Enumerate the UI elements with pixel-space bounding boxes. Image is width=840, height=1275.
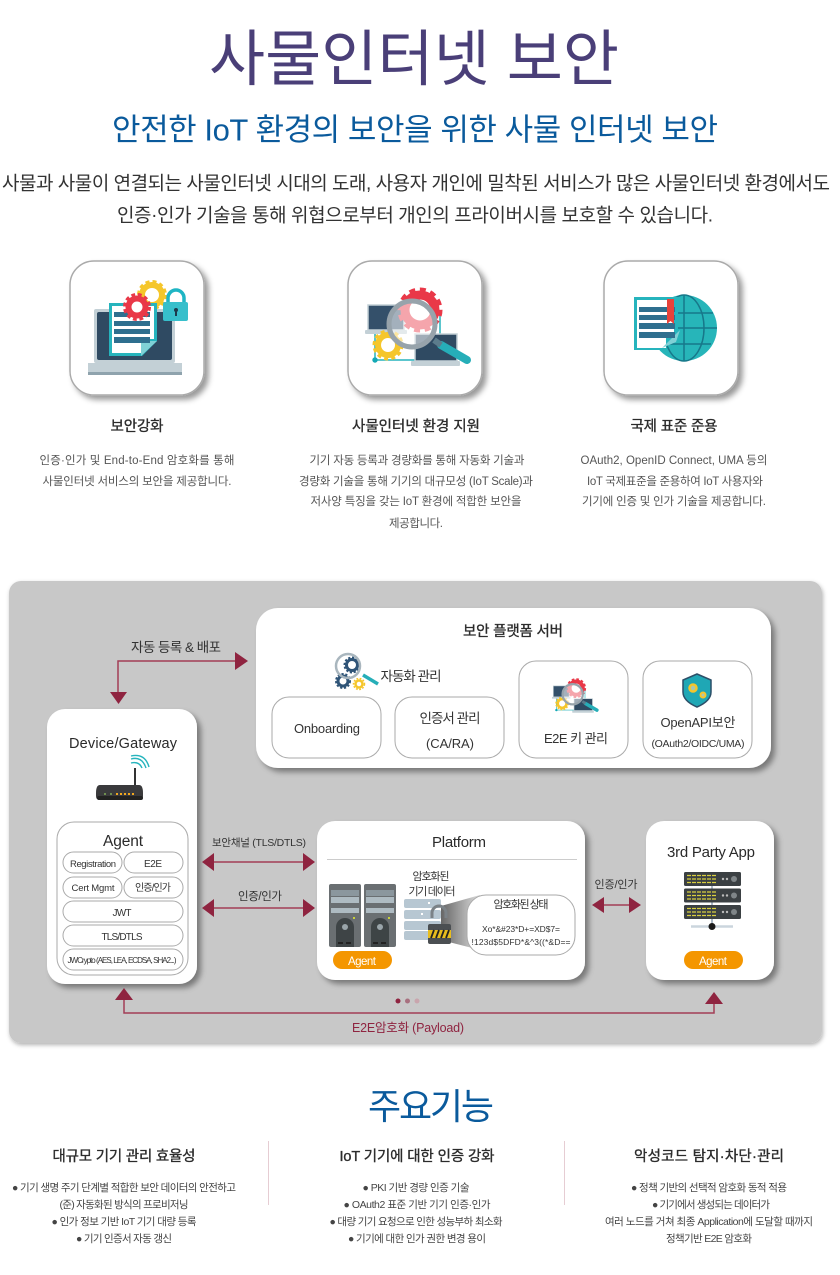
box: Onboarding: Onboarding [294,721,360,736]
list: ● 정책 기반의 선택적 암호화 동적 적용 [631,1182,787,1194]
description: 사물인터넷 서비스의 보안을 제공합니다. [42,475,232,488]
description: 제공합니다. [389,517,443,530]
icon: card with magnifier [348,261,482,395]
list: ● 인가 정보 기반 IoT 기기 대량 등록 [52,1216,197,1228]
badge: Agent [684,951,743,969]
list [605,1182,813,1245]
callout: encrypted state: 암호화된 상태 [494,898,548,911]
label: 자동화 관리 [380,669,442,684]
box: Agent: Agent [103,833,144,850]
icon: router [96,755,149,800]
description: 기기 자동 등록과 경량화를 통해 자동화 기술과 [310,453,525,467]
pill: JWCrypto [63,949,183,970]
list: (준) 자동화된 방식의 프로비저닝 [60,1199,188,1211]
badge: Agent: Agent [348,956,377,968]
panel: Device/Gateway [47,709,197,984]
list [12,1181,236,1245]
box: Onboarding [272,697,381,758]
arrow: auto registration [110,640,248,704]
callout cone [441,895,480,950]
arrow: E2E payload [115,988,723,1035]
panel: 보안 플랫폼 서버 [256,608,771,768]
box: E2E 키 관리 [519,661,628,758]
label: encrypted device data: 암호화된 [412,870,450,883]
arrow: 인증/인가 right [592,878,641,913]
description: 저사양 특징을 갖는 IoT 환경에 적합한 보안을 [310,494,522,508]
column: 대규모 기기 관리 효율성 [12,1148,236,1245]
panel: 보안강화 [40,261,234,488]
description: OAuth2, OpenID Connect, UMA 등의 [580,454,768,467]
heading: 국제 표준 준용 [630,418,718,435]
label: encrypted device data: 기기 데이터 [408,885,456,898]
list: ● 기기 생명 주기 단계별 적합한 보안 데이터의 안전하고 [12,1181,236,1194]
box: 인증서 관리: (CA/RA) [426,736,474,751]
panel: 사물인터넷 환경 지원 [299,261,533,530]
pill: Registration: Registration [70,859,116,870]
list: ● OAuth2 표준 기반 기기 인증·인가 [344,1199,491,1211]
description: 인증·인가 및 End-to-End 암호화를 통해 [40,454,234,467]
description: 기기에 인증 및 인가 기술을 제공합니다. [582,495,766,508]
list: ● 기기에서 생성되는 데이터가 [652,1199,770,1211]
pill: JWT: JWT [112,908,132,919]
box: Agent [57,822,188,975]
box: 인증서 관리: 인증서 관리 [420,711,480,726]
pill: Registration [63,852,122,873]
heading: 보안 플랫폼 서버 [463,623,563,640]
intro text: 사물과 사물이 연결되는 사물인터넷 시대의 도래, 사용자 개인에 밀착된 서비스가 많은 사물인터넷 환경에서도 [2,172,830,194]
description [40,454,234,488]
panel: 국제 표준 준용 [580,261,768,508]
icon: laptop with document, gears and lock [70,261,204,395]
icon: automation gears [336,654,378,690]
arrow: 인증/인가 right: 인증/인가 [594,878,638,891]
subtitle: 안전한 IoT 환경의 보안을 위한 사물 인터넷 보안 [112,112,718,148]
column: IoT 기기에 대한 인증 강화: IoT 기기에 대한 인증 강화 [340,1148,494,1165]
callout: encrypted state [467,895,575,955]
list: ● PKI 기반 경량 인증 기술 [362,1181,470,1194]
description: IoT 국제표준을 준용하여 IoT 사용자와 [587,474,763,488]
heading: 보안강화 [110,418,164,435]
badge: Agent: Agent [699,956,728,968]
panel: Platform [317,821,585,980]
arrow: 보안채널: 보안채널 (TLS/DTLS) [212,837,306,849]
icon: server rack [684,872,741,930]
column: 악성코드 탐지·차단·관리: 악성코드 탐지·차단·관리 [634,1148,784,1165]
pill: Cert Mgmt [63,877,122,898]
heading: Device/Gateway [69,736,178,752]
box: E2E 키 관리: E2E 키 관리 [544,731,608,746]
list: 정책기반 E2E 암호화 [666,1233,752,1245]
list: ● 기기에 대한 인가 권한 변경 용이 [348,1232,486,1245]
arrow: auto registration: 자동 등록 & 배포 [131,640,221,655]
box: OpenAPI보안: OpenAPI보안 [660,715,736,730]
pill: E2E [124,852,183,873]
description: 경량화 기술을 통해 기기의 대규모성 (IoT Scale)과 [299,474,533,488]
pill: Cert Mgmt: Cert Mgmt [72,883,115,894]
pill: TLS/DTLS [63,925,183,946]
description [299,453,533,530]
intro text: 인증·인가 기술을 통해 위협으로부터 개인의 프라이버시를 보호할 수 있습니다. [117,204,713,226]
column: 대규모 기기 관리 효율성: 대규모 기기 관리 효율성 [52,1148,196,1165]
pill: JWCrypto: JWCrypto (AES, LEA, ECDSA, SHA2...) [68,956,177,965]
heading: 3rd Party App [667,844,755,861]
column: 악성코드 탐지·차단·관리 [605,1148,813,1245]
pill: E2E: E2E [144,859,162,870]
pill: 인증/인가: 인증/인가 [135,882,171,894]
heading: 주요기능: 주요기능 [368,1086,494,1127]
pill: 인증/인가 [124,877,183,898]
column: IoT 기기에 대한 인증 강화 [330,1148,503,1245]
icon: database with lock [404,899,451,944]
arrow: 인증/인가 left: 인증/인가 [238,890,282,903]
intro text [2,172,830,226]
box: OpenAPI보안: (OAuth2/OIDC/UMA) [652,738,744,750]
pill: JWT [63,901,183,922]
callout: encrypted state: !123d$5DFD*&^3((*&D== [472,937,571,947]
list: ● 대량 기기 요청으로 인한 성능부하 최소화 [330,1215,503,1228]
heading: 사물인터넷 환경 지원 [352,418,480,435]
list [330,1181,503,1245]
arrow: 인증/인가 left [202,890,315,917]
panel: architecture diagram [9,581,822,1043]
arrow: E2E payload: E2E암호화 (Payload) [352,1021,464,1035]
icon: servers [329,884,396,947]
description [580,454,768,508]
icon: document and globe [604,261,738,395]
box: 인증서 관리 [395,697,504,758]
title: 사물인터넷 보안 [209,25,619,93]
list: 여러 노드를 거쳐 최종 Application에 도달할 때까지 [605,1216,813,1228]
label: encrypted device data [408,870,456,898]
pagination dots [396,998,420,1004]
list: ● 기기 인증서 자동 갱신 [76,1233,172,1245]
pill: TLS/DTLS: TLS/DTLS [102,932,143,943]
panel: 3rd Party App [646,821,774,980]
box: OpenAPI보안 [643,661,752,758]
arrow: 보안채널 [202,837,315,871]
callout: encrypted state: Xo*&#23*D+=XD$7= [482,924,560,934]
heading: Platform [432,834,486,851]
badge: Agent [333,951,392,969]
